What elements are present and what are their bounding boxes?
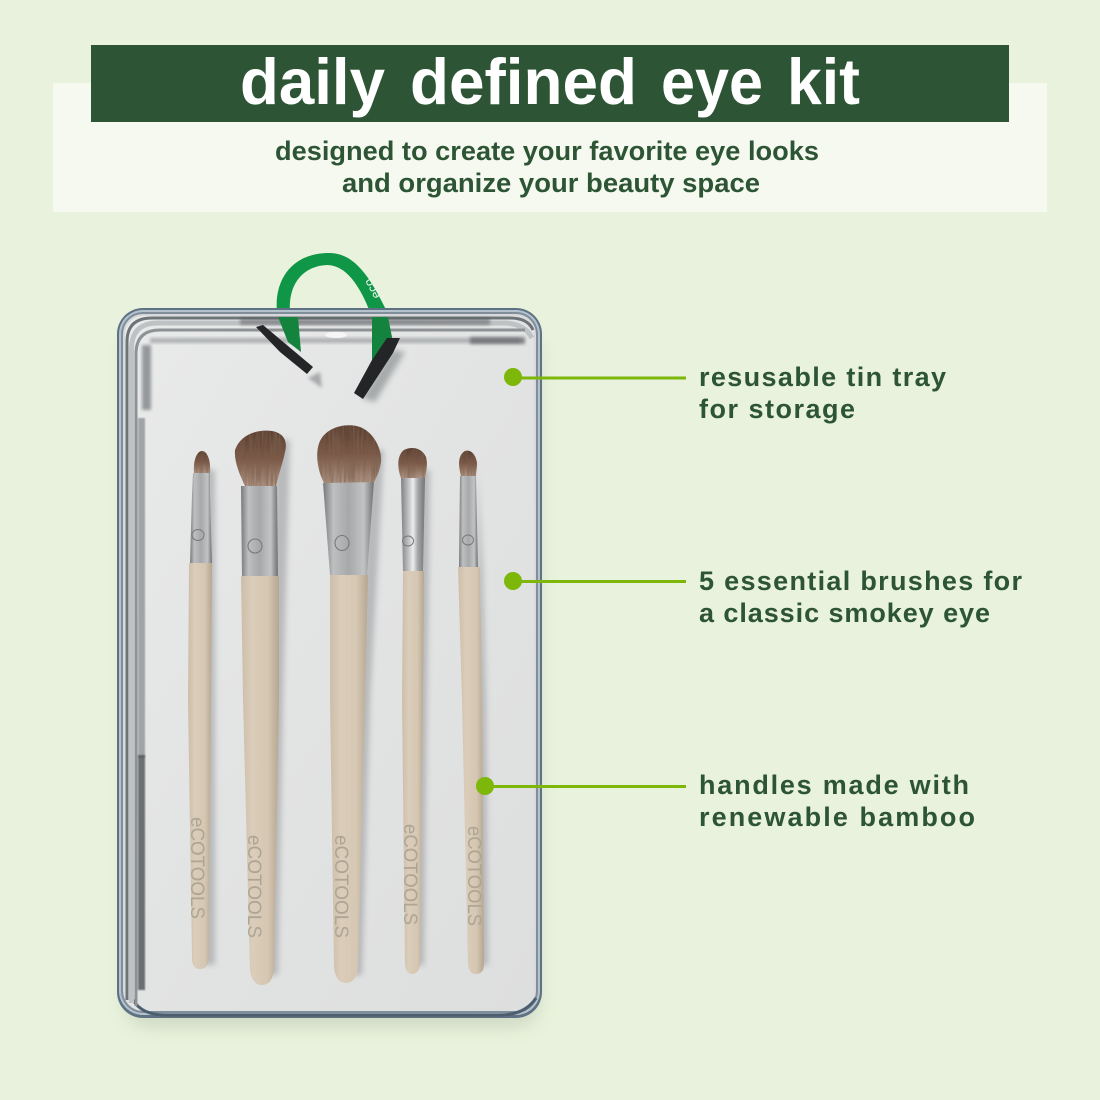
subtitle panel [53,83,1047,212]
handle [241,576,279,985]
callout text: tin tray: resusable tin tray [699,362,946,392]
tray shadow [124,330,540,1028]
bristles [459,451,477,476]
bristles [235,431,286,486]
callout text: brushes [699,566,1022,628]
callout text: tin tray: for storage [699,394,855,424]
ferrule [323,481,374,575]
bristles [194,451,210,473]
callout: tin tray [504,362,946,424]
tray highlights and streaks [138,318,525,990]
ferrule logo [335,536,349,550]
tray lower edge [133,998,536,1015]
handle logo: eCOTOOLS [243,835,264,938]
ferrule logo [192,530,204,540]
handle [330,575,368,983]
ferrule [190,473,212,563]
handle logo: eCOTOOLS [399,824,420,925]
tray inner lip [127,318,533,1006]
title: defined [410,45,637,118]
callout: brushes [504,566,1022,628]
callout text: brushes: 5 essential brushes for [699,566,1022,596]
bristles [317,425,381,483]
ferrule [401,478,425,571]
icon: green ribbon loop: eco [361,276,384,302]
title: daily [240,45,385,118]
subtitle text: designed to create your favorite eye looks [275,136,819,166]
title: eye [661,45,763,118]
brush soft shadows [205,440,488,975]
handle [402,571,424,974]
subtitle text [275,136,819,198]
icon: green ribbon loop [277,253,387,312]
ribbon inside tray [278,317,405,402]
brush 4 [398,448,427,974]
handle [458,567,484,974]
title banner [91,45,1009,122]
ferrule [241,486,278,576]
brush 5 [458,451,484,974]
brush 2 [235,431,286,985]
callout text: brushes: a classic smokey eye [699,598,990,628]
handle logo: eCOTOOLS [463,826,484,926]
subtitle text: and organize your beauty space [342,168,760,198]
bristles [398,448,427,478]
handle logo: eCOTOOLS [330,835,351,938]
callout text: bamboo handles [699,770,975,832]
callout text: bamboo handles: handles made with [699,770,969,800]
title: kit [787,45,860,118]
metal tin tray [117,308,542,1018]
callout text: bamboo handles: renewable bamboo [699,802,975,832]
icon: left black cord tip [256,325,313,374]
brush 3 [317,425,381,983]
ferrule [459,476,478,567]
ferrule logo [462,535,474,545]
callout: bamboo handles [476,770,975,832]
callout text: tin tray [699,362,946,424]
ferrule logo [248,539,262,553]
brush 1 [186,451,212,969]
handle [188,563,212,969]
handle logo: eCOTOOLS [186,817,207,919]
icon: right black cord tip [354,338,400,399]
ferrule logo [402,536,414,546]
